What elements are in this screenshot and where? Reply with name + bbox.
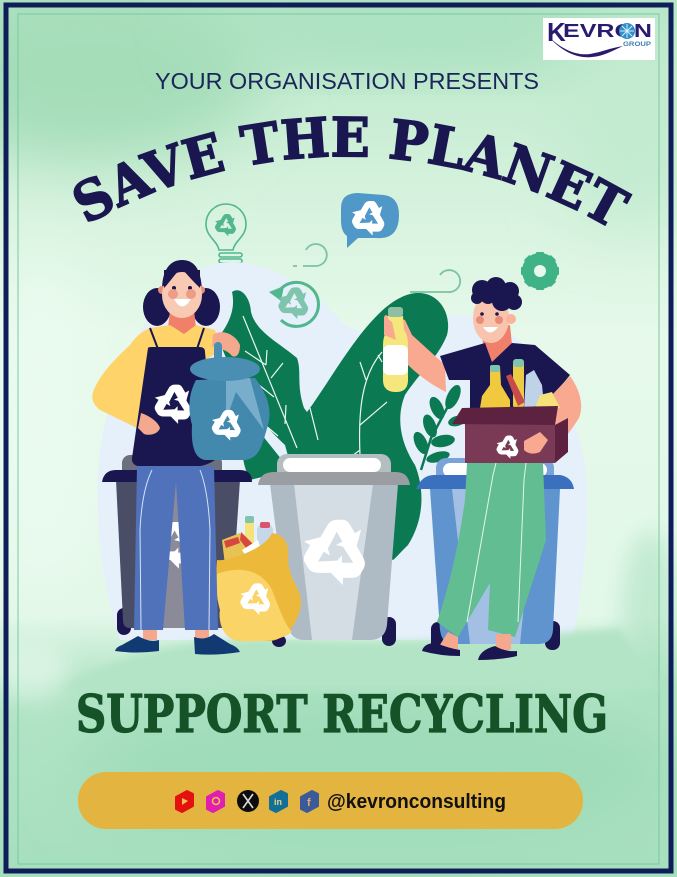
- ground wash: [60, 628, 660, 690]
- man: [383, 277, 581, 660]
- woman: ankles and shoes: [115, 630, 240, 655]
- woman: sweater: [92, 325, 222, 435]
- logo: EVRON: [563, 21, 652, 41]
- grey bin: [258, 454, 410, 647]
- icon: circular recycle arrow: [269, 282, 318, 326]
- blue jug: [189, 342, 269, 460]
- blue bin: [416, 458, 574, 650]
- woman: trousers: [134, 466, 218, 630]
- man: trousers: [437, 463, 546, 637]
- man: neck and head: [473, 293, 516, 362]
- man: box: [452, 406, 568, 463]
- man: bottles in box: [480, 359, 560, 409]
- woman: right hand: [212, 332, 240, 357]
- social bar: [78, 772, 583, 829]
- man: curly hair: [471, 277, 522, 311]
- yellow bag: [216, 516, 301, 641]
- icon: instagram: [207, 791, 224, 812]
- man: raised arm: [385, 315, 446, 392]
- icon: facebook: [301, 791, 318, 812]
- woman: hair: [143, 260, 220, 326]
- woman: [92, 260, 240, 655]
- man: right arm: [530, 376, 581, 458]
- dark bin: [102, 455, 252, 635]
- pale backdrop shape: [98, 262, 587, 640]
- icon: x: [237, 790, 259, 812]
- icon: linkedin: in: [274, 797, 282, 807]
- icon: light bulb: [206, 204, 246, 263]
- icon: linkedin: [270, 791, 287, 812]
- icon: speech bubble: [341, 193, 399, 248]
- woman: apron: [132, 328, 215, 467]
- man: feet and slippers: [422, 632, 517, 660]
- hook doodles: [293, 244, 460, 292]
- woman: left hand: [138, 413, 160, 435]
- icon: gear: [521, 252, 559, 290]
- logo: GROUP: [623, 41, 652, 48]
- logo: [543, 17, 655, 60]
- woman: neck and face: [158, 268, 205, 335]
- icon: youtube: [176, 791, 193, 812]
- title: save the planet: SAVE THE PLANET: [74, 116, 632, 226]
- man: bottle held up: [383, 307, 408, 392]
- small plant: [410, 383, 467, 470]
- icon: facebook: f: [307, 797, 311, 809]
- logo: K: [547, 17, 566, 47]
- large leaves: [218, 290, 448, 560]
- social handle: @kevronconsulting: [327, 791, 506, 813]
- man: t-shirt: [440, 343, 570, 415]
- presenter line: YOUR ORGANISATION PRESENTS: [155, 68, 539, 94]
